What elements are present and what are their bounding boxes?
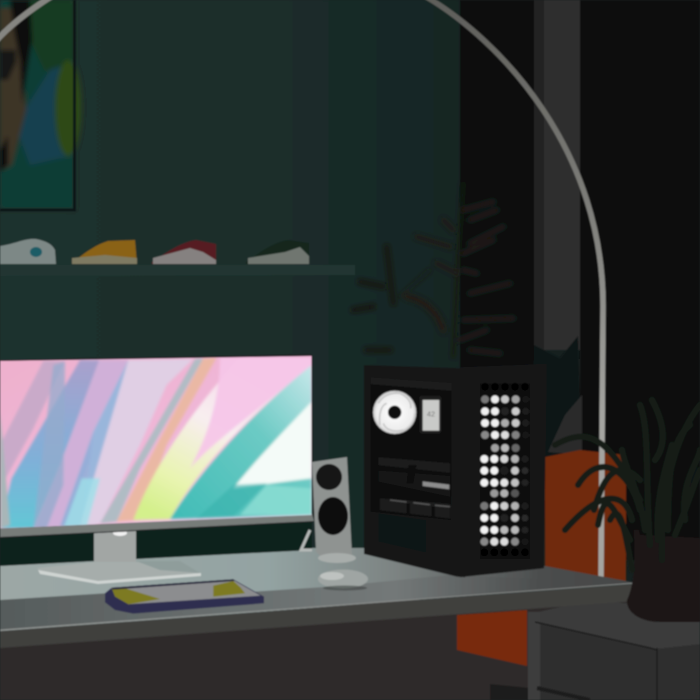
case front frame — [364, 365, 465, 577]
right plant pot — [627, 527, 700, 622]
gpu — [379, 457, 450, 497]
side cabinet — [528, 600, 700, 700]
orange ottoman — [457, 610, 527, 666]
under desk area — [0, 600, 700, 700]
desk — [0, 548, 637, 648]
desk near band — [0, 575, 637, 630]
pc case — [364, 364, 547, 577]
orange chair — [545, 450, 626, 582]
psu shroud — [378, 513, 426, 553]
curtains — [460, 0, 700, 560]
painting — [0, 0, 81, 209]
painting frame — [0, 0, 74, 210]
monitor screen wallpaper — [0, 355, 313, 530]
shoe: green — [246, 240, 309, 264]
shelf — [0, 265, 355, 276]
mesh holes — [480, 383, 530, 559]
cpu cooler fan — [373, 391, 416, 434]
shoe: orange — [72, 240, 137, 264]
monitor stand — [37, 528, 201, 584]
pump display: 42 — [427, 410, 435, 419]
shoe accent: teal — [30, 247, 42, 257]
ram and lower fans — [380, 498, 450, 518]
shoe: red — [152, 240, 216, 264]
speaker — [301, 457, 356, 563]
pump display — [419, 396, 441, 433]
wall strip behind monitor — [0, 520, 312, 566]
monitor — [0, 354, 314, 584]
back plant — [353, 183, 513, 357]
shoe: white — [0, 239, 56, 264]
monitor bezel — [0, 354, 314, 538]
keyboard — [105, 579, 264, 614]
case side panel — [460, 364, 547, 577]
desk front edge — [0, 584, 637, 648]
speaker lower driver — [318, 497, 348, 535]
speaker upper driver — [316, 464, 342, 490]
mouse — [318, 570, 368, 590]
wall — [0, 0, 465, 560]
desk top surface — [0, 548, 637, 632]
lamp arc — [0, 0, 603, 578]
top bracket — [371, 377, 452, 391]
right plant leaves — [555, 400, 700, 570]
shoes on shelf — [0, 239, 309, 264]
grey curtain sliver — [548, 395, 582, 455]
glass interior — [371, 377, 452, 563]
speaker stand — [301, 530, 312, 550]
dark leaf behind chair — [530, 336, 582, 470]
desk edge highlight — [0, 583, 637, 630]
